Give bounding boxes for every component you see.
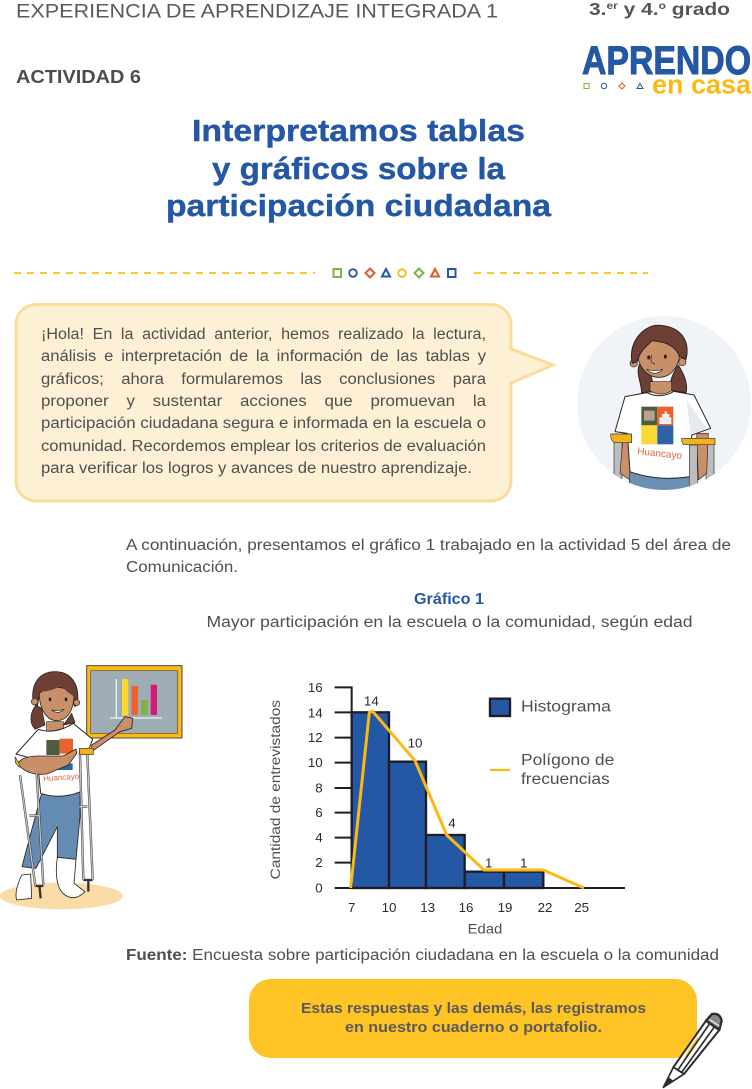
callout	[249, 979, 697, 1058]
speech bubble	[16, 304, 553, 501]
y-axis numbers: 0	[315, 880, 323, 895]
x-axis numbers	[348, 900, 589, 915]
x-axis numbers: 25	[574, 900, 589, 915]
illustration: girl in circle: Huancayo	[637, 446, 683, 462]
header: experience title: EXPERIENCIA DE APRENDIZAJE INTEGRADA 1	[16, 2, 498, 22]
header: grade: er	[606, 1, 618, 12]
x-axis numbers: 13	[420, 900, 435, 915]
chart heading: Gráfico 1	[414, 591, 484, 608]
y-axis numbers: 10	[308, 755, 323, 770]
chart axes	[335, 687, 625, 888]
histogram chart	[268, 680, 625, 936]
logo: Aprendo en casa: en casa	[652, 70, 752, 100]
illustration: girl in circle	[577, 316, 751, 497]
x-axis label: Edad	[468, 921, 502, 936]
bubble text: participación ciudadana segura e informada en la escuela o	[41, 415, 486, 432]
y-axis numbers: 8	[315, 780, 323, 795]
y-axis numbers: 4	[315, 830, 323, 845]
y-axis numbers: 6	[315, 805, 323, 820]
x-axis numbers: 16	[459, 900, 473, 915]
bubble text	[41, 326, 486, 477]
x-axis numbers: 7	[348, 900, 355, 915]
bar value labels	[364, 693, 527, 870]
title: participación ciudadana	[166, 188, 552, 223]
bar value labels: 1	[520, 855, 527, 870]
bar value labels: 4	[448, 816, 456, 831]
y-axis numbers: 2	[315, 855, 323, 870]
illustration: girl with crutches pointing at chart	[0, 666, 182, 909]
title: y gráficos sobre la	[212, 151, 506, 186]
intro paragraph: A continuación, presentamos el gráfico 1 trabajado en la actividad 5 del área de	[126, 537, 731, 554]
y-axis numbers: 14	[308, 705, 323, 720]
callout: en nuestro cuaderno o portafolio.	[345, 1019, 602, 1036]
y-axis numbers	[308, 680, 323, 895]
bubble text: comunidad. Recordemos emplear los criterios de evaluación	[41, 438, 486, 455]
intro paragraph	[126, 537, 731, 576]
bar value labels: 1	[485, 855, 492, 870]
legend: Polígono de	[521, 752, 614, 769]
bubble text: ¡Hola! En la actividad anterior, hemos realizado la lectura,	[41, 326, 486, 343]
activity label: ACTIVIDAD 6	[16, 66, 141, 87]
x-axis numbers: 22	[538, 900, 552, 915]
frequency polygon	[351, 711, 584, 888]
bubble text: proponer y sustentar acciones que promuevan la	[41, 393, 486, 410]
bubble text: análisis e interpretación de la información de las tablas y	[41, 348, 486, 365]
intro paragraph: Comunicación.	[126, 559, 238, 576]
bar value labels: 10	[408, 735, 422, 750]
legend: frecuencias	[521, 771, 610, 788]
icon: pencil	[663, 1014, 722, 1087]
bubble text: para verificar los logros y avances de nuestro aprendizaje.	[41, 460, 472, 477]
title	[166, 113, 552, 223]
y-axis numbers: 12	[308, 730, 323, 745]
header: grade: o	[659, 1, 666, 12]
callout: Estas respuestas y las demás, las registramos	[301, 1000, 646, 1017]
legend	[490, 699, 614, 788]
y-axis numbers: 16	[308, 680, 323, 695]
chart subtitle: Mayor participación en la escuela o la comunidad, según edad	[206, 614, 692, 631]
bar value labels: 14	[364, 693, 379, 708]
y-axis label: Cantidad de entrevistados	[268, 700, 283, 879]
legend: Histograma	[521, 699, 612, 716]
divider with shapes	[14, 268, 648, 278]
x-axis numbers: 10	[382, 900, 396, 915]
title: Interpretamos tablas	[192, 113, 525, 148]
x-axis numbers: 19	[498, 900, 512, 915]
bubble text: gráficos; ahora formularemos las conclusiones para	[41, 371, 486, 388]
histogram bars	[352, 712, 543, 888]
illustration: girl with crutches pointing at chart: Huancayo	[43, 772, 80, 783]
source note: Fuente: Encuesta sobre participación ciudadana en la escuela o la comunidad	[126, 947, 719, 964]
